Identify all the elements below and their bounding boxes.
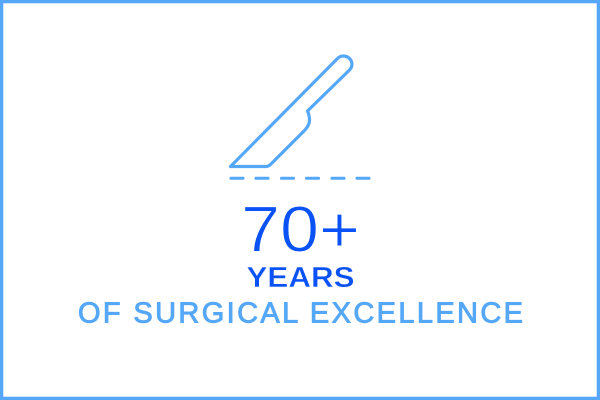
icon: scalpel <box>230 56 352 166</box>
big number: 70+: 70+ <box>241 192 360 266</box>
subheading: of surgical excellence: OF SURGICAL EXCELLENCE <box>78 298 523 330</box>
dashed divider <box>230 177 370 180</box>
heading: YEARS: YEARS <box>246 262 354 294</box>
